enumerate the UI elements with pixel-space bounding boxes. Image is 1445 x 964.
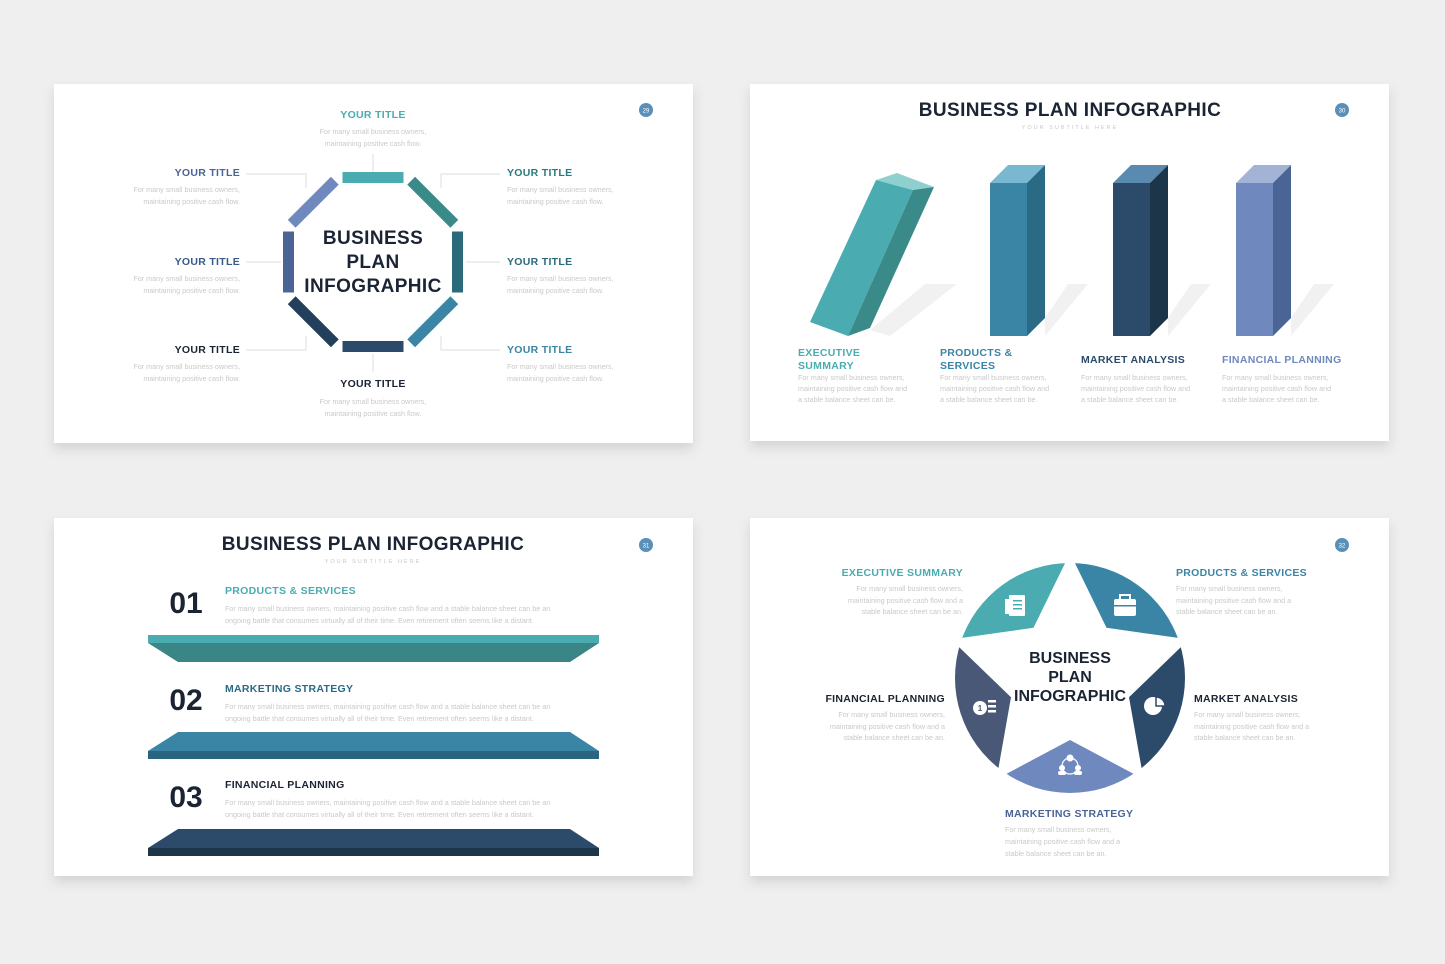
labels right: For many small business owners, bbox=[507, 274, 614, 283]
label executive summary bbox=[842, 567, 963, 616]
labels left: For many small business owners, bbox=[133, 362, 240, 371]
label market analysis bbox=[1194, 693, 1309, 742]
page number 31 bbox=[639, 538, 653, 552]
captions: SERVICES bbox=[940, 360, 995, 372]
star circle chart bbox=[951, 553, 1189, 793]
bar 2 bbox=[990, 165, 1045, 336]
labels left: maintaining positive cash flow. bbox=[143, 374, 240, 383]
center title: PLAN bbox=[346, 252, 400, 273]
bar 4 bbox=[1236, 165, 1291, 336]
label executive summary: maintaining positive cash flow and a bbox=[848, 596, 963, 605]
labels right: For many small business owners, bbox=[507, 185, 614, 194]
center title bbox=[1014, 650, 1126, 705]
labels right: For many small business owners, bbox=[507, 362, 614, 371]
captions: For many small business owners, bbox=[1081, 373, 1188, 382]
labels left: YOUR TITLE bbox=[175, 167, 240, 179]
item 01: PRODUCTS & SERVICES bbox=[225, 585, 356, 597]
center title: INFOGRAPHIC bbox=[304, 276, 442, 297]
label products & services: PRODUCTS & SERVICES bbox=[1176, 567, 1307, 579]
label marketing strategy: MARKETING STRATEGY bbox=[1005, 808, 1133, 820]
item 03: FINANCIAL PLANNING bbox=[225, 779, 345, 791]
bar 3 bbox=[1113, 165, 1168, 336]
title: BUSINESS PLAN INFOGRAPHIC bbox=[919, 100, 1221, 121]
center title: PLAN bbox=[1048, 669, 1092, 686]
center title: INFOGRAPHIC bbox=[1014, 688, 1126, 705]
item 01 bbox=[148, 585, 599, 662]
labels left: For many small business owners, bbox=[133, 185, 240, 194]
label top bbox=[320, 109, 426, 148]
label bottom bbox=[320, 378, 426, 418]
label top: For many small business owners, bbox=[320, 127, 426, 136]
labels left: maintaining positive cash flow. bbox=[143, 286, 240, 295]
captions: For many small business owners, bbox=[1222, 373, 1329, 382]
label top: YOUR TITLE bbox=[340, 109, 406, 121]
item 02: For many small business owners, maintaining positive cash flow and a stable balance sheet can be an bbox=[225, 702, 550, 711]
label bottom: For many small business owners, bbox=[320, 397, 426, 406]
panel: octagon slide bbox=[54, 84, 693, 443]
label financial planning: FINANCIAL PLANNING bbox=[825, 693, 945, 705]
label marketing strategy bbox=[1005, 808, 1133, 858]
label market analysis: stable balance sheet can be an. bbox=[1194, 733, 1296, 742]
icon: team bbox=[1058, 754, 1082, 775]
labels right: maintaining positive cash flow. bbox=[507, 286, 604, 295]
label top: maintaining positive cash flow. bbox=[325, 139, 421, 148]
labels left: YOUR TITLE bbox=[175, 256, 240, 268]
page number 29 bbox=[639, 103, 653, 117]
item 03 bbox=[148, 779, 599, 856]
label market analysis: MARKET ANALYSIS bbox=[1194, 693, 1298, 705]
shadows bbox=[870, 284, 1334, 336]
item 02: ongoing battle that consumes virtually all of their time. Even retirement often seems like a distant. bbox=[225, 714, 534, 723]
title: BUSINESS PLAN INFOGRAPHIC bbox=[222, 534, 524, 555]
captions: maintaining positive cash flow and bbox=[1222, 384, 1331, 393]
icon: document bbox=[1005, 595, 1025, 616]
captions: a stable balance sheet can be. bbox=[798, 395, 896, 404]
captions: maintaining positive cash flow and bbox=[798, 384, 907, 393]
item 03: For many small business owners, maintaining positive cash flow and a stable balance sheet can be an bbox=[225, 798, 550, 807]
page number 30: 30 bbox=[1339, 108, 1346, 114]
captions: a stable balance sheet can be. bbox=[1222, 395, 1320, 404]
label market analysis: maintaining positive cash flow and a bbox=[1194, 722, 1309, 731]
bar 1 tilted bbox=[810, 173, 934, 336]
captions: PRODUCTS & bbox=[940, 347, 1013, 359]
label executive summary: stable balance sheet can be an. bbox=[862, 607, 963, 616]
item 01: For many small business owners, maintaining positive cash flow and a stable balance sheet can be an bbox=[225, 604, 550, 613]
labels right: YOUR TITLE bbox=[507, 344, 572, 356]
item 02: 02 bbox=[169, 684, 203, 717]
label bottom: YOUR TITLE bbox=[340, 378, 406, 390]
label products & services: stable balance sheet can be an. bbox=[1176, 607, 1278, 616]
captions: a stable balance sheet can be. bbox=[1081, 395, 1179, 404]
label bottom: maintaining positive cash flow. bbox=[325, 409, 421, 418]
labels right: YOUR TITLE bbox=[507, 256, 572, 268]
captions: EXECUTIVE bbox=[798, 347, 860, 359]
page number 31: 31 bbox=[643, 544, 650, 550]
labels right bbox=[507, 167, 614, 383]
label executive summary: EXECUTIVE SUMMARY bbox=[842, 567, 963, 579]
title: YOUR SUBTITLE HERE bbox=[325, 559, 421, 565]
captions bbox=[798, 347, 1342, 404]
label products & services: maintaining positive cash flow and a bbox=[1176, 596, 1291, 605]
labels right: YOUR TITLE bbox=[507, 167, 572, 179]
label financial planning: For many small business owners, bbox=[838, 710, 945, 719]
panel: 3D bars slide bbox=[750, 84, 1389, 441]
captions: MARKET ANALYSIS bbox=[1081, 354, 1185, 366]
center title: BUSINESS bbox=[323, 228, 423, 249]
captions: For many small business owners, bbox=[940, 373, 1047, 382]
captions: maintaining positive cash flow and bbox=[1081, 384, 1190, 393]
panel: star slide bbox=[750, 518, 1389, 876]
icon: coins bbox=[973, 700, 996, 715]
icon: pie chart bbox=[1144, 697, 1165, 715]
center title bbox=[304, 228, 442, 297]
labels right: maintaining positive cash flow. bbox=[507, 197, 604, 206]
item 03: ongoing battle that consumes virtually all of their time. Even retirement often seems like a distant. bbox=[225, 810, 534, 819]
labels left bbox=[133, 167, 240, 383]
title bbox=[919, 100, 1221, 131]
labels left: maintaining positive cash flow. bbox=[143, 197, 240, 206]
labels right: maintaining positive cash flow. bbox=[507, 374, 604, 383]
label products & services: For many small business owners, bbox=[1176, 584, 1283, 593]
label marketing strategy: stable balance sheet can be an. bbox=[1005, 849, 1107, 858]
icon: briefcase bbox=[1114, 595, 1136, 616]
item 02 bbox=[148, 683, 599, 759]
page number 29: 29 bbox=[643, 108, 650, 114]
labels left: YOUR TITLE bbox=[175, 344, 240, 356]
label marketing strategy: maintaining positive cash flow and a bbox=[1005, 837, 1120, 846]
page number 30 bbox=[1335, 103, 1349, 117]
label financial planning bbox=[825, 693, 945, 742]
page number 32 bbox=[1335, 538, 1349, 552]
item 01: 01 bbox=[169, 587, 203, 620]
item 02: MARKETING STRATEGY bbox=[225, 683, 353, 695]
label marketing strategy: For many small business owners, bbox=[1005, 825, 1112, 834]
captions: maintaining positive cash flow and bbox=[940, 384, 1049, 393]
title bbox=[222, 534, 524, 565]
label market analysis: For many small business owners, bbox=[1194, 710, 1301, 719]
captions: SUMMARY bbox=[798, 360, 854, 372]
captions: a stable balance sheet can be. bbox=[940, 395, 1038, 404]
icon: coins: 1 bbox=[978, 704, 983, 713]
center title: BUSINESS bbox=[1029, 650, 1111, 667]
captions: For many small business owners, bbox=[798, 373, 905, 382]
title: YOUR SUBTITLE HERE bbox=[1022, 125, 1118, 131]
label financial planning: maintaining positive cash flow and a bbox=[830, 722, 945, 731]
captions: FINANCIAL PLANNING bbox=[1222, 354, 1342, 366]
label financial planning: stable balance sheet can be an. bbox=[844, 733, 945, 742]
octagon ring bbox=[283, 172, 463, 352]
page number 32: 32 bbox=[1339, 544, 1346, 550]
item 01: ongoing battle that consumes virtually all of their time. Even retirement often seems like a distant. bbox=[225, 616, 534, 625]
labels left: For many small business owners, bbox=[133, 274, 240, 283]
label products & services bbox=[1176, 567, 1307, 616]
item 03: 03 bbox=[169, 781, 203, 814]
panel: layers slide bbox=[54, 518, 693, 876]
label executive summary: For many small business owners, bbox=[856, 584, 963, 593]
